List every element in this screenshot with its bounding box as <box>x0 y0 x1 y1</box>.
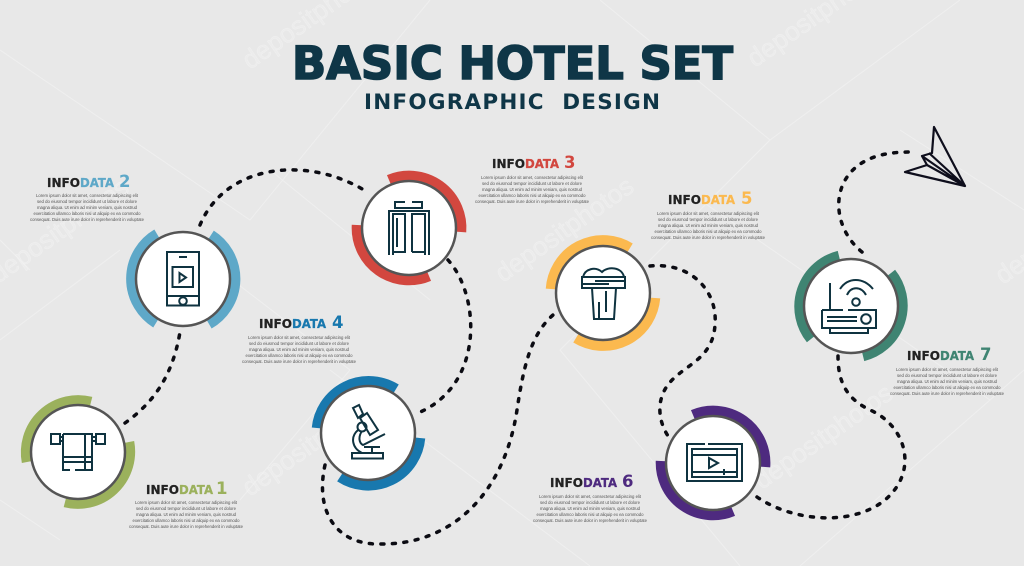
label: infodata 7: INFO <box>907 348 940 363</box>
subtitle: INFOGRAPHIC DESIGN <box>364 90 660 115</box>
label: infodata 1: consequat. Duis aute irure dolor in reprehenderit in voluptate <box>129 524 244 529</box>
text: depositphotos <box>236 384 386 502</box>
label: infodata 3: Lorem ipsum dolor sit amet, consectetur adipiscing elit <box>481 175 584 180</box>
label: infodata 4: 4 <box>332 313 343 332</box>
icon: ice cream cup <box>582 268 625 319</box>
text: depositphotos <box>489 170 639 288</box>
label: infodata 5: INFO <box>668 192 701 207</box>
label: infodata 1: DATA <box>179 482 213 497</box>
label: infodata 1: exercitation ullamco laboris nisi ut aliquip ex ea commodo <box>132 518 240 523</box>
label: infodata 4: DATA <box>292 316 326 331</box>
label: infodata 4 <box>242 313 357 364</box>
icon: phone video <box>167 252 199 306</box>
label: infodata 3: exercitation ullamco laboris nisi ut aliquip ex ea commodo <box>478 193 586 198</box>
icon: elevator <box>389 202 429 255</box>
icon: wifi router <box>822 280 876 333</box>
icon: microscope <box>352 405 385 458</box>
step 6: video <box>661 411 765 515</box>
label: infodata 3: sed do eiusmod tempor incididunt ut labore et dolore <box>482 181 583 186</box>
label: infodata 5: exercitation ullamco laboris nisi ut aliquip ex ea commodo <box>654 229 762 234</box>
label: infodata 6: Lorem ipsum dolor sit amet, consectetur adipiscing elit <box>539 494 642 499</box>
label: infodata 5: Lorem ipsum dolor sit amet, consectetur adipiscing elit <box>657 211 760 216</box>
label: infodata 4: consequat. Duis aute irure dolor in reprehenderit in voluptate <box>242 359 357 364</box>
label: infodata 6: magna aliqua. Ut enim ad minim veniam, quis nostrud <box>540 506 641 511</box>
label: infodata 7: magna aliqua. Ut enim ad minim veniam, quis nostrud <box>897 379 998 384</box>
label: infodata 6: INFO <box>550 475 583 490</box>
label: infodata 2: Lorem ipsum dolor sit amet, consectetur adipiscing elit <box>36 193 139 198</box>
label: infodata 3: consequat. Duis aute irure dolor in reprehenderit in voluptate <box>475 199 590 204</box>
step 5: drink <box>551 240 655 346</box>
label: infodata 3 <box>475 153 590 204</box>
label: infodata 6: 6 <box>622 472 633 491</box>
label: infodata 3: INFO <box>492 156 525 171</box>
step 1: towel <box>26 400 130 504</box>
label: infodata 7: sed do eiusmod tempor incididunt ut labore et dolore <box>897 373 998 378</box>
label: infodata 5: magna aliqua. Ut enim ad minim veniam, quis nostrud <box>658 223 759 228</box>
icon: video player <box>687 444 742 481</box>
label: infodata 1: magna aliqua. Ut enim ad minim veniam, quis nostrud <box>136 512 237 517</box>
label: infodata 2: sed do eiusmod tempor incididunt ut labore et dolore <box>37 199 138 204</box>
step 7: router <box>800 256 902 356</box>
label: infodata 2 <box>30 172 145 222</box>
label: infodata 7: DATA <box>940 348 974 363</box>
label: infodata 6: consequat. Duis aute irure dolor in reprehenderit in voluptate <box>533 518 648 523</box>
label: infodata 2: DATA <box>80 175 114 190</box>
step 3: elevator <box>357 176 461 280</box>
label: infodata 5: DATA <box>701 192 735 207</box>
label: infodata 4: exercitation ullamco laboris nisi ut aliquip ex ea commodo <box>246 353 353 358</box>
label: infodata 6: sed do eiusmod tempor incididunt ut labore et dolore <box>540 500 641 505</box>
icon: towel <box>51 434 105 470</box>
label: infodata 2: exercitation ullamco laboris nisi ut aliquip ex ea commodo <box>34 211 141 216</box>
label: infodata 4: sed do eiusmod tempor incididunt ut labore et dolore <box>249 341 350 346</box>
dashed route <box>125 152 911 544</box>
title: BASIC HOTEL SET <box>292 37 733 90</box>
label: infodata 1: INFO <box>146 482 179 497</box>
label: infodata 7: Lorem ipsum dolor sit amet, consectetur adipiscing elit <box>896 367 999 372</box>
label: infodata 5: 5 <box>741 189 752 208</box>
label: infodata 6: exercitation ullamco laboris nisi ut aliquip ex ea commodo <box>536 512 644 517</box>
label: infodata 7 <box>890 345 1005 396</box>
step 2: phone <box>131 232 235 326</box>
icon: paper plane <box>905 127 965 186</box>
label: infodata 2: magna aliqua. Ut enim ad minim veniam, quis nostrud <box>37 205 138 210</box>
label: infodata 2: 2 <box>119 172 130 191</box>
label: infodata 3: 3 <box>564 153 575 172</box>
label: infodata 2: consequat. Duis aute irure dolor in reprehenderit in voluptate <box>30 217 145 222</box>
label: infodata 1: 1 <box>216 479 227 498</box>
label: infodata 2: INFO <box>47 175 80 190</box>
label: infodata 5: consequat. Duis aute irure dolor in reprehenderit in voluptate <box>651 235 766 240</box>
label: infodata 5 <box>651 189 766 240</box>
label: infodata 4: Lorem ipsum dolor sit amet, consectetur adipiscing elit <box>248 335 351 340</box>
text: depositphotos <box>748 377 898 495</box>
label: infodata 7: 7 <box>980 345 991 364</box>
label: infodata 3: magna aliqua. Ut enim ad minim veniam, quis nostrud <box>482 187 583 192</box>
label: infodata 3: DATA <box>525 156 559 171</box>
label: infodata 1: Lorem ipsum dolor sit amet, consectetur adipiscing elit <box>135 500 238 505</box>
label: infodata 6 <box>533 472 648 523</box>
label: infodata 7: consequat. Duis aute irure dolor in reprehenderit in voluptate <box>890 391 1005 396</box>
label: infodata 5: sed do eiusmod tempor incididunt ut labore et dolore <box>658 217 759 222</box>
step 4: microscope <box>317 381 420 485</box>
label: infodata 1: sed do eiusmod tempor incididunt ut labore et dolore <box>136 506 237 511</box>
label: infodata 1 <box>129 479 244 529</box>
label: infodata 6: DATA <box>583 475 617 490</box>
label: infodata 7: exercitation ullamco laboris nisi ut aliquip ex ea commodo <box>894 385 1001 390</box>
label: infodata 4: magna aliqua. Ut enim ad minim veniam, quis nostrud <box>249 347 350 352</box>
label: infodata 4: INFO <box>259 316 292 331</box>
